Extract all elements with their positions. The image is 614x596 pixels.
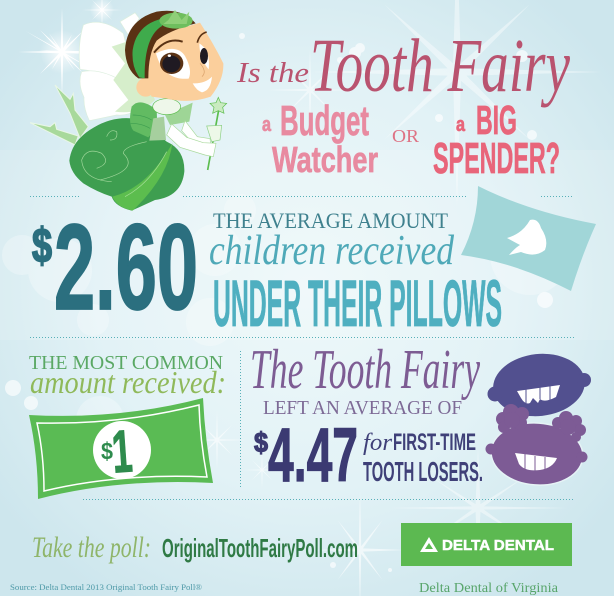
title [236,24,570,108]
subtitle: budget watcher: Watcher [272,139,378,180]
text block: the average amount [209,208,502,340]
fairy arm and wand [167,97,227,170]
subtitle: budget watcher: Budget [280,97,369,144]
subtitle: budget watcher [262,97,378,180]
fairy tail leaves [30,85,88,145]
text block: the average amount: children received [209,228,455,274]
subtitle: budget watcher: a [262,114,272,136]
fairy wings [79,13,155,121]
big number: $4.47: 4.47 [268,413,358,498]
text: first-time tooth losers: FIRST-TIME [393,429,476,456]
fairy dress [69,99,193,211]
icon: dollar bill: 1 [110,417,134,486]
text: first-time tooth losers [363,429,483,487]
big number: $2.60 [32,199,198,335]
icon: dollar bill: $ [101,438,114,465]
fairy illustration [30,10,227,211]
footer: take the poll [32,531,358,564]
footer: take the poll: OriginalToothFairyPoll.com [162,533,358,563]
big number: $4.47: $ [254,427,268,458]
text: left an average of: LEFT AN AVERAGE OF [263,397,462,419]
title: Is the [236,58,309,89]
fairy head [125,10,223,101]
subtitle: big spender [433,97,560,183]
footer: take the poll: Take the poll: [32,531,151,564]
big number: $4.47 [254,413,358,498]
dotted dividers [30,196,575,500]
subtitle: big spender: BIG [476,97,517,143]
fairy sparkle stars [16,0,122,96]
big number: $2.60: $ [32,220,52,273]
text: first-time tooth losers: for [363,430,393,456]
text block: the average amount: THE AVERAGE AMOUNT [213,208,449,233]
icon: pillow with tooth [461,186,596,291]
logo: delta dental: DELTA DENTAL [442,537,554,554]
heading: most common amount: amount received: [30,364,226,400]
subtitle: big spender: a [456,114,466,136]
heading: the tooth fairy: The Tooth Fairy [250,339,480,401]
heading: most common amount: THE MOST COMMON [29,352,223,374]
heading: most common amount [29,352,226,400]
icon: boy smiling face [488,349,591,421]
icon: dollar bill [29,398,213,499]
text: source: Source: Delta Dental 2013 Original Tooth Fairy Poll® [10,582,203,592]
icon: girl smiling face [486,404,588,488]
logo: delta dental [401,523,572,566]
or label: OR [392,126,419,146]
background sparkle stars [187,0,602,596]
text: delta dental of virginia: Delta Dental of Virginia [419,581,559,596]
text: first-time tooth losers: TOOTH LOSERS. [363,456,483,487]
big number: $2.60: 2.60 [54,199,198,335]
